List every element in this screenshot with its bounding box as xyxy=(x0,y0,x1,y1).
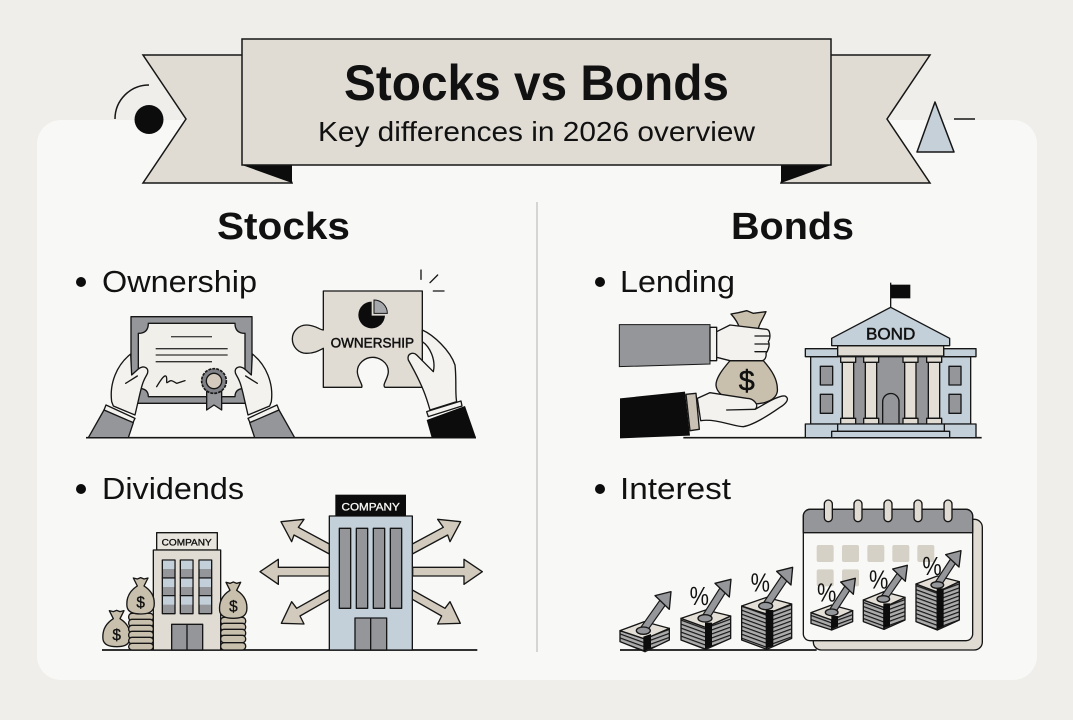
decoration: circle and arc xyxy=(115,85,164,134)
icon: small company building xyxy=(153,533,221,650)
subtitle: Key differences in 2026 overview xyxy=(318,116,755,147)
icon: money stack 5: % xyxy=(869,564,888,594)
icon: right money bag: $ xyxy=(229,599,238,616)
icon: money stack 5 xyxy=(863,564,907,629)
ribbon left tail xyxy=(143,55,292,183)
icon: money stack 6: % xyxy=(922,551,942,581)
title: Stocks vs Bonds xyxy=(344,55,729,111)
icon: left money bag: $ xyxy=(136,594,145,611)
icon: left hand xyxy=(88,354,148,438)
icon: spark lines xyxy=(421,270,444,291)
icon: money stack 6 xyxy=(916,551,961,630)
icon: dividend arrows xyxy=(260,519,482,624)
illustration: dividends xyxy=(102,495,482,650)
heading: Stocks: Stocks xyxy=(217,206,350,248)
icon: lower hand xyxy=(620,392,787,438)
icon: money stack 1 xyxy=(620,592,671,652)
illustration: lending xyxy=(619,283,982,438)
icon: small money bag xyxy=(103,610,130,647)
bullet: Interest: Interest xyxy=(620,471,731,506)
icon: money stack 4 xyxy=(811,578,855,630)
bullet: Dividends: Dividends xyxy=(102,471,244,506)
icon: calendar xyxy=(803,500,982,650)
icon: money stack 4: % xyxy=(817,578,836,608)
icon: money stack 3 xyxy=(742,567,793,649)
title ribbon xyxy=(143,39,930,183)
icon: left money bag xyxy=(127,578,154,614)
icon: money bag xyxy=(716,311,777,404)
illustration: ownership xyxy=(86,270,476,438)
icon: puzzle piece xyxy=(292,291,422,387)
icon: large company building: COMPANY xyxy=(341,502,401,514)
icon: money bag: $ xyxy=(739,366,755,398)
icon: certificate xyxy=(131,317,252,410)
main panel xyxy=(37,120,1037,680)
icon: money stack 3: % xyxy=(751,568,770,598)
ribbon right fold xyxy=(781,165,831,183)
bullet: Ownership: Ownership xyxy=(102,264,257,299)
icon: money stack 2 xyxy=(681,579,731,649)
icon: hand holding puzzle xyxy=(408,330,476,438)
decoration: triangle and dash xyxy=(917,102,975,152)
icon: bond building xyxy=(805,283,976,438)
icon: small company building: COMPANY xyxy=(162,538,212,548)
icon: upper hand with money bag xyxy=(619,311,777,404)
icon: bond building: BOND xyxy=(866,324,915,343)
ribbon right tail xyxy=(781,55,930,183)
icon: left coin stack xyxy=(129,613,153,650)
illustration: interest xyxy=(620,500,982,652)
ribbon left fold xyxy=(242,165,292,183)
icon: puzzle piece: OWNERSHIP xyxy=(331,334,414,350)
icon: large company building xyxy=(329,495,412,650)
icon: small money bag: $ xyxy=(112,627,121,644)
icon: right coin stack xyxy=(221,617,246,650)
icon: money stack 2: % xyxy=(690,581,709,611)
ribbon main band xyxy=(242,39,831,165)
icon: right hand xyxy=(235,354,295,438)
heading: Bonds: Bonds xyxy=(731,206,854,248)
icon: right money bag xyxy=(220,582,247,618)
bullet: Lending: Lending xyxy=(620,264,735,299)
